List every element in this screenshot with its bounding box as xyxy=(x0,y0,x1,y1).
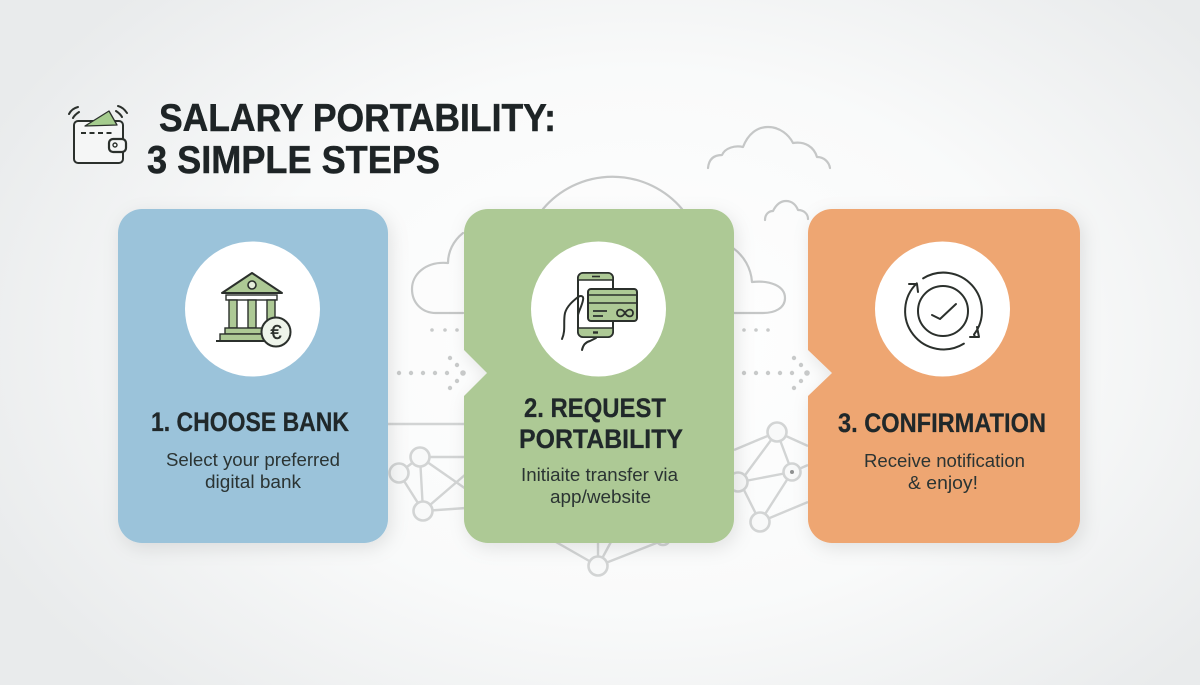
panel: step 2 request portability xyxy=(464,209,734,543)
text: step 2 description: app/website xyxy=(550,486,651,507)
title: SALARY PORTABILITY: xyxy=(159,97,556,140)
arrow: dotted arrow from step 1 to step 2 xyxy=(397,328,466,390)
panel: step 1 choose bank xyxy=(118,209,388,543)
icon: bank with euro coin xyxy=(216,273,290,346)
icon: circular arrows with check mark xyxy=(905,273,982,349)
illustration: right network xyxy=(728,422,808,532)
icon: phone and payment card in hand xyxy=(562,273,637,350)
text: step 3 description: & enjoy! xyxy=(908,472,978,493)
arrow: dotted arrow from step 2 to step 3 xyxy=(742,328,810,390)
illustration: large cloud xyxy=(412,177,785,313)
text: step 1 description: digital bank xyxy=(205,471,302,492)
heading: step 2 xyxy=(519,393,683,454)
illustration: small cloud xyxy=(765,201,808,220)
icon: bank with euro coin: € xyxy=(270,322,282,344)
panel: step 3 confirmation xyxy=(808,209,1080,543)
illustration: bottom network xyxy=(556,531,670,576)
title xyxy=(147,97,556,182)
icon: wallet xyxy=(69,106,127,163)
illustration: left network xyxy=(388,424,466,520)
illustration: upper right cloud xyxy=(708,127,830,168)
title: 3 SIMPLE STEPS xyxy=(147,139,440,182)
text: step 2 description xyxy=(521,464,679,507)
text: step 1 description: Select your preferred xyxy=(166,449,340,470)
heading: step 3: 3. CONFIRMATION xyxy=(838,408,1046,438)
text: step 1 description xyxy=(166,449,340,492)
text: step 3 description xyxy=(864,450,1025,493)
heading: step 1: 1. CHOOSE BANK xyxy=(151,407,349,437)
heading: step 2: 2. REQUEST xyxy=(524,393,666,423)
text: step 3 description: Receive notification xyxy=(864,450,1025,471)
text: step 2 description: Initiaite transfer via xyxy=(521,464,679,485)
heading: step 2: PORTABILITY xyxy=(519,424,683,454)
